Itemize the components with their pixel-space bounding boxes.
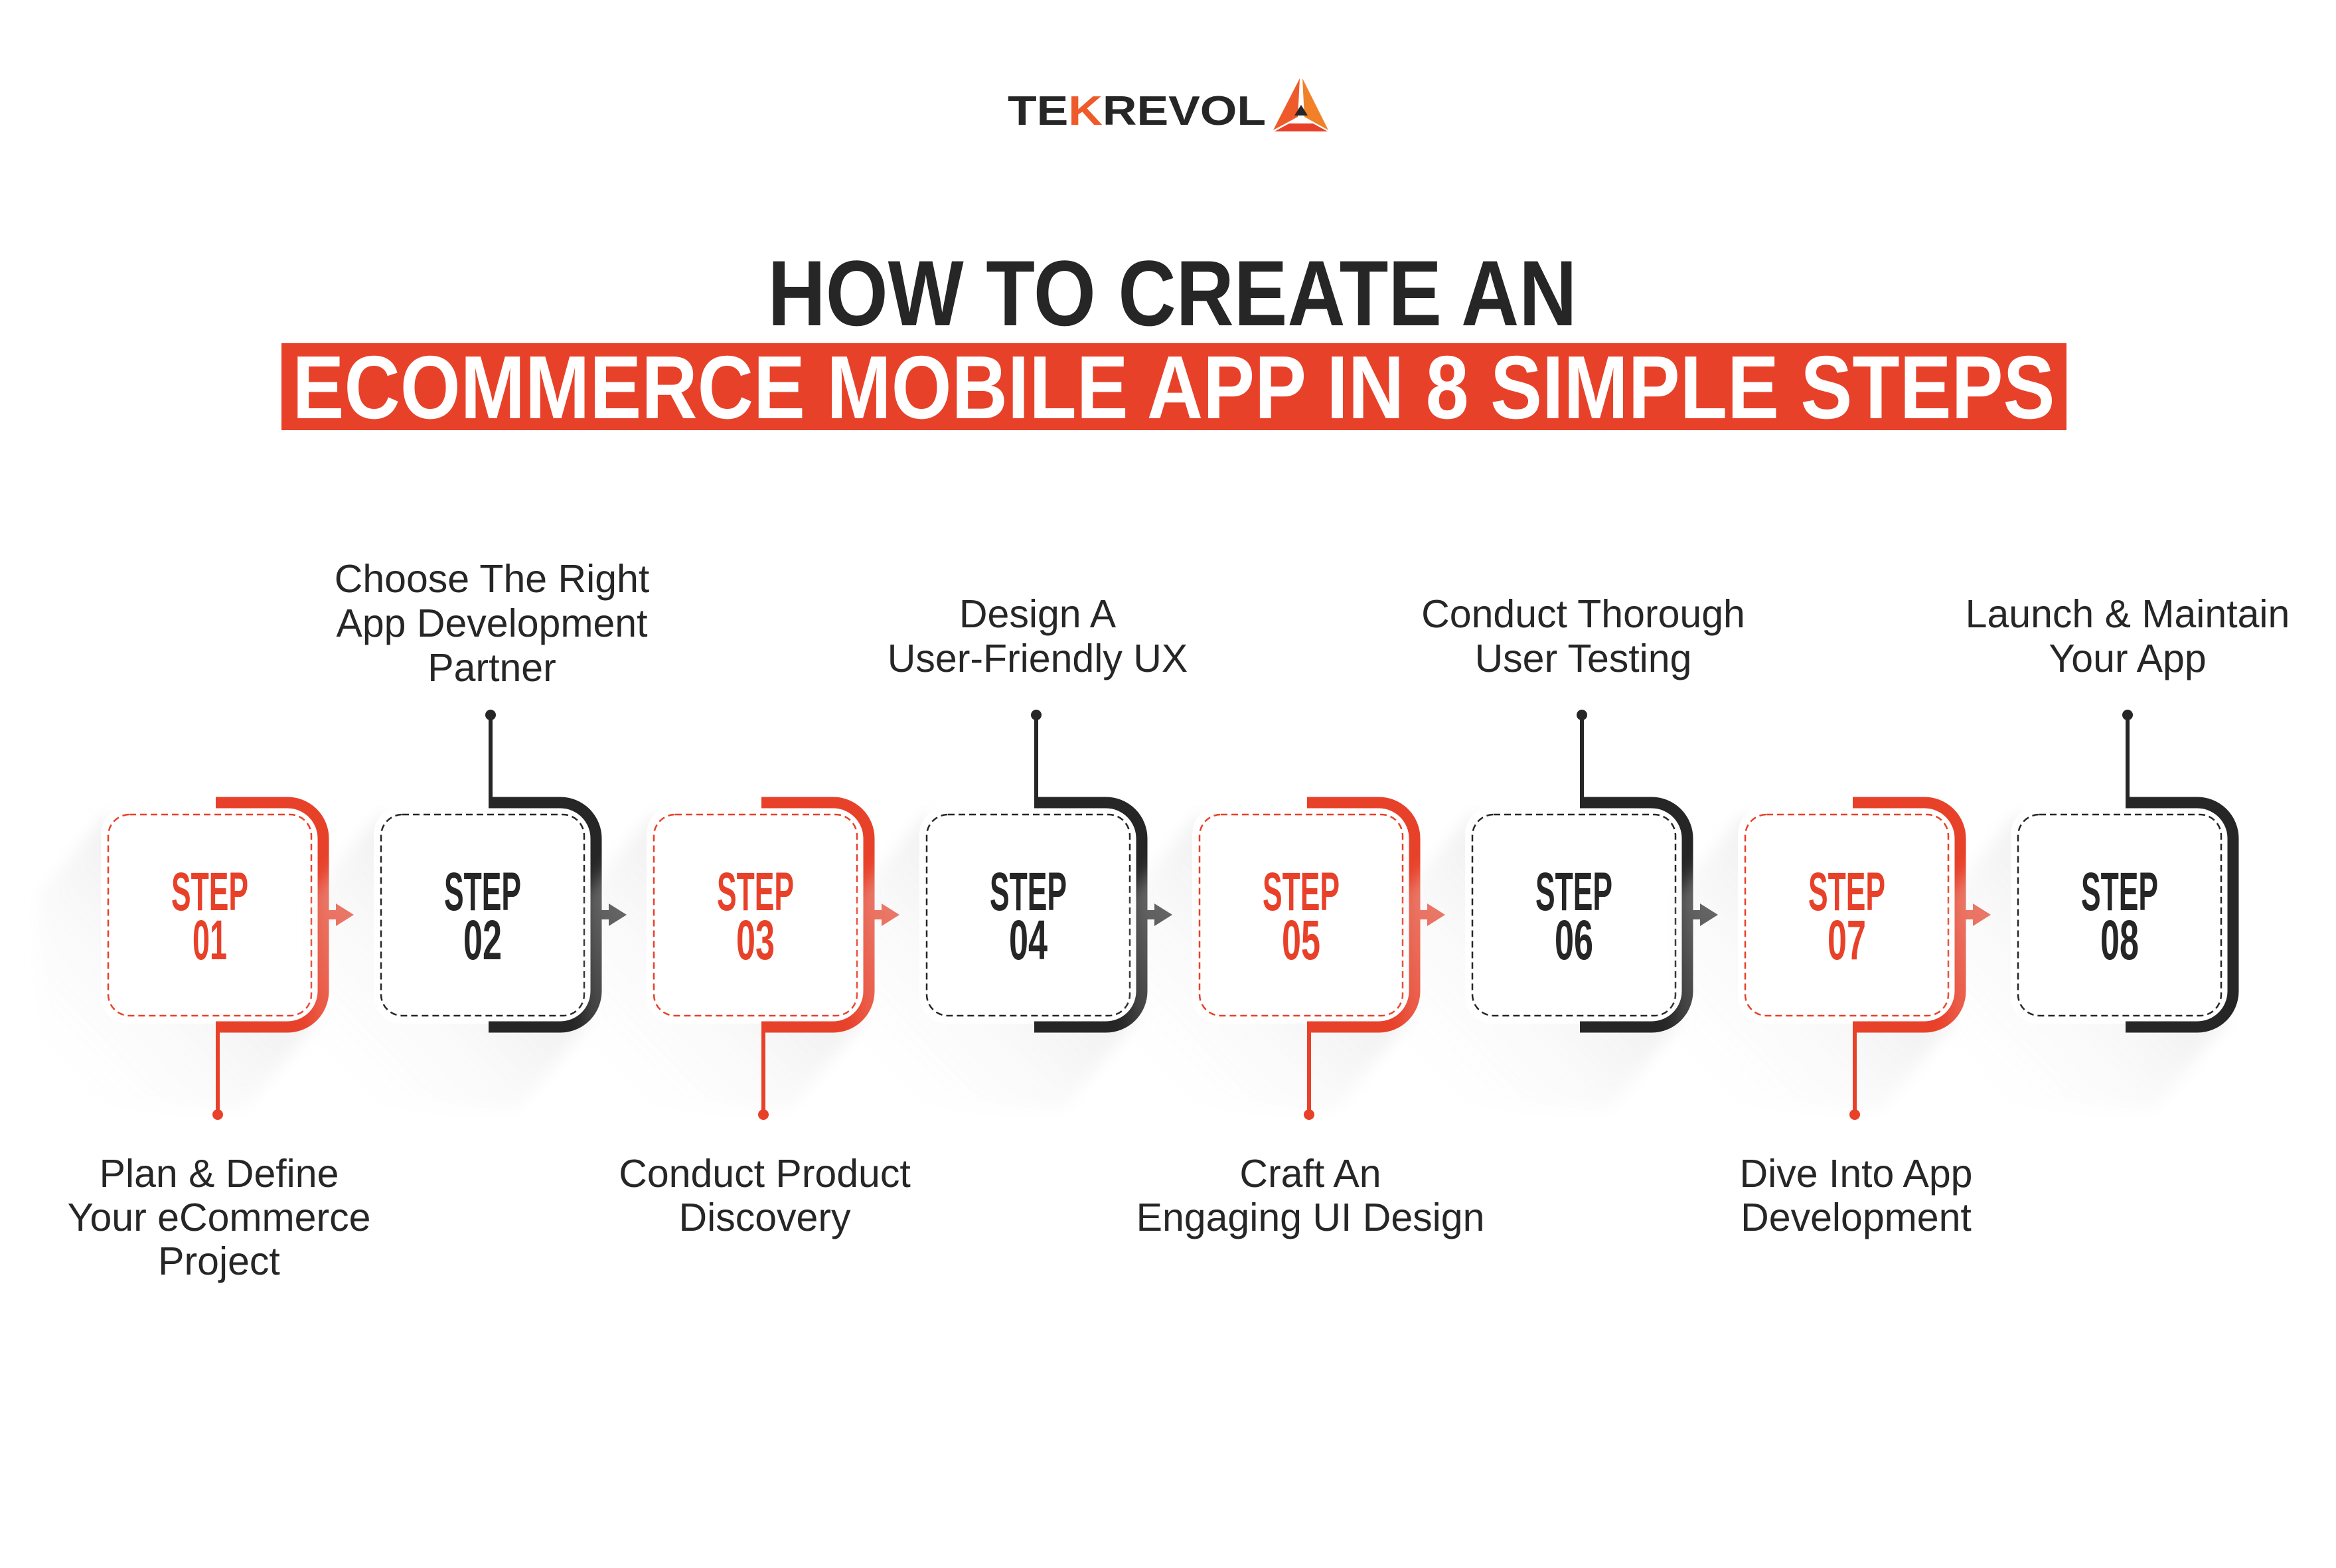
label 08: Your App [2049, 637, 2207, 680]
label 05: Craft An [1239, 1152, 1381, 1196]
step 03: STEP [717, 862, 794, 922]
label 04: Design A [959, 592, 1117, 636]
label 06: Conduct Thorough [1421, 592, 1745, 636]
label 08 [1966, 592, 2290, 680]
step 04 [857, 710, 1172, 1109]
step 04: STEP [990, 862, 1067, 922]
label 01: Plan & Define [100, 1152, 339, 1196]
step 02: STEP [444, 862, 521, 922]
step 08 [1948, 710, 2233, 1109]
step 05 [1130, 803, 1445, 1120]
step 02 [311, 710, 627, 1109]
step 03: 03 [736, 909, 775, 971]
label 02: App Development [336, 601, 648, 645]
step 06 [1403, 710, 1718, 1109]
step 05: 05 [1282, 909, 1320, 971]
label 05: Engaging UI Design [1136, 1196, 1484, 1239]
label 03: Conduct Product [619, 1152, 911, 1196]
label 06 [1421, 592, 1745, 680]
label 04 [888, 592, 1188, 680]
label 01: Your eCommerce [68, 1196, 370, 1239]
step 01: 01 [193, 909, 227, 971]
label 03 [619, 1152, 911, 1239]
step 02: 02 [463, 909, 502, 971]
label 07: Dive Into App [1740, 1152, 1972, 1196]
steps row [39, 557, 2290, 1283]
label 02: Partner [428, 646, 556, 690]
logo: TekRevol [1008, 78, 1328, 134]
step 04: 04 [1009, 909, 1048, 971]
step 07 [1675, 803, 1991, 1120]
step 06: STEP [1535, 862, 1612, 922]
label 01: Project [158, 1239, 280, 1283]
step 03 [584, 803, 899, 1120]
step 06: 06 [1555, 909, 1593, 971]
step 01 [39, 803, 354, 1120]
step 08: STEP [2081, 862, 2158, 922]
title line 1: HOW TO CREATE AN [767, 241, 1577, 345]
label 08: Launch & Maintain [1966, 592, 2290, 636]
label 01 [68, 1152, 370, 1283]
label 02 [335, 557, 649, 690]
step 05: STEP [1263, 862, 1340, 922]
step 07: 07 [1828, 909, 1866, 971]
logo: TekRevol: TEKREVOL [1008, 88, 1266, 134]
label 07 [1740, 1152, 1972, 1239]
step 08: 08 [2100, 909, 2139, 971]
label 07: Development [1741, 1196, 1972, 1239]
label 02: Choose The Right [335, 557, 649, 601]
title banner: ECOMMERCE MOBILE APP IN 8 SIMPLE STEPS [292, 337, 2055, 437]
label 03: Discovery [678, 1196, 851, 1239]
step 01: STEP [171, 862, 248, 922]
label 06: User Testing [1475, 637, 1691, 680]
label 05 [1136, 1152, 1484, 1239]
label 04: User-Friendly UX [888, 637, 1188, 680]
step 07: STEP [1808, 862, 1885, 922]
